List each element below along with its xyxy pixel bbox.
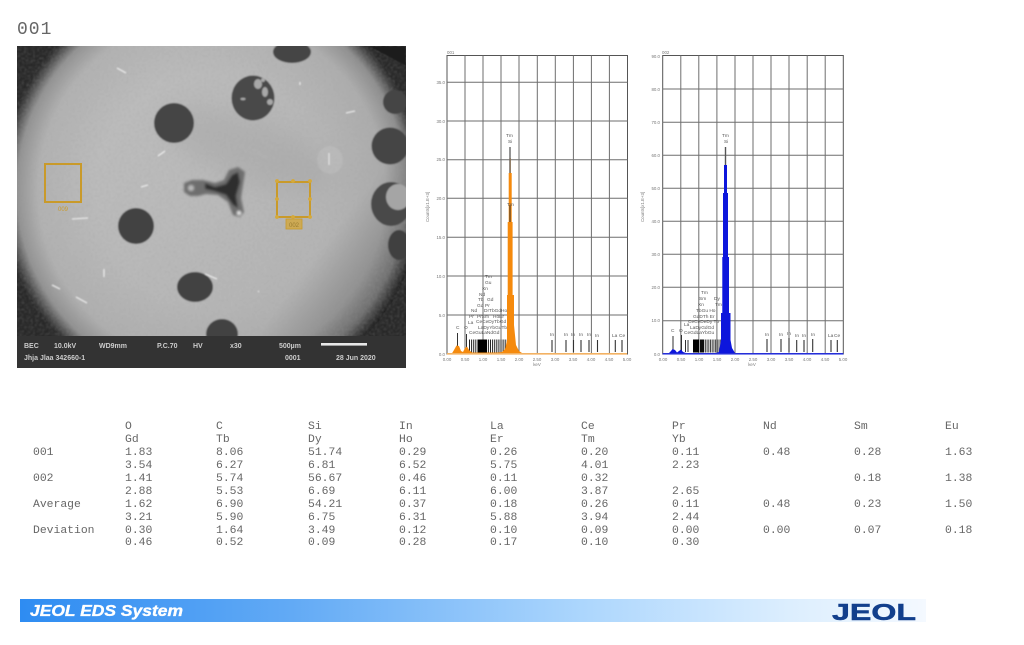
data table: 0.28 [399,537,427,549]
axis labels: 15.0 [436,235,446,240]
spectrum peak labels: In [802,333,806,339]
spectrum peak labels: In [787,331,791,337]
spectrum peak labels: CeGuLaNdGd [469,330,500,336]
data table: 1.38 [945,473,973,485]
spectrum peak labels: La [468,320,474,326]
axis labels: 4.00 [587,357,596,362]
axis labels: 001 [447,50,455,55]
data table: 0.00 [672,525,700,537]
spectrum peak labels: Tm [722,133,729,139]
data table: In [399,421,413,433]
data table: C [216,421,223,433]
data table: 5.88 [490,512,518,524]
data table: Gd [125,434,139,446]
title: 001 [17,20,52,40]
data table: 0.10 [490,525,518,537]
spectrum peak labels: Dy [714,296,720,302]
image caption: 28 Jun 2020 [336,355,376,362]
axis labels: 25.0 [436,157,446,162]
image caption: BEC [24,343,39,350]
data table: 2.44 [672,512,700,524]
spectrum peak labels: Nd [471,308,477,314]
image caption: Jhja Jlaa 342660-1 [24,355,85,362]
spectrum peak labels: O [679,328,683,334]
scale bar [321,343,367,346]
data table: 0.23 [854,499,882,511]
data table: 6.52 [399,460,427,472]
axis labels: Counts[x1.E+3] [640,192,645,222]
micrograph image area [17,46,406,336]
data table: 4.01 [581,460,609,472]
data table: Si [308,421,322,433]
axis labels: 3.00 [767,357,776,362]
peak marker lines [458,333,622,354]
data table: 2.65 [672,486,700,498]
data table: 3.49 [308,525,336,537]
spectrum peak labels: Si [724,139,728,145]
spectrum peak labels: C [671,328,675,334]
spectrum peak labels [456,133,625,339]
spectrum peak labels: Pr [485,303,490,309]
data table: Nd [763,421,777,433]
axis labels: 2.00 [731,357,740,362]
spectrum peak labels: Ce [834,333,840,339]
axis labels: 90.0 [651,54,661,59]
data table: 1.50 [945,499,973,511]
axis labels: 1.00 [479,357,488,362]
data table: 001 [33,447,54,459]
image caption: WD9mm [99,343,127,350]
spectrum peak labels: In [811,332,815,338]
axis labels: 35.0 [436,80,446,85]
data table: Pr [672,421,686,433]
axis labels: 4.50 [821,357,830,362]
data table: O [125,421,132,433]
spectrum peak labels: Tm [701,290,708,296]
axis labels: 2.50 [533,357,542,362]
axis labels: 002 [662,50,670,55]
spectrum peak labels: Tm [507,202,514,208]
data table: 2.88 [125,486,153,498]
spectrum peak labels: In [550,332,554,338]
data table: 0.07 [854,525,881,537]
image caption: HV [193,343,203,350]
spectrum peak labels: In [579,332,583,338]
dense element markers [693,340,722,352]
selection box: 009: 009 [58,207,69,213]
axis labels: 30.0 [651,252,661,257]
data table: 56.67 [308,473,342,485]
axis labels: 3.50 [569,357,578,362]
spectrum peak labels: La [828,333,834,339]
selection box: 002 [275,179,312,229]
data table: 5.90 [216,512,244,524]
data table: 0.11 [490,473,518,485]
selection box: 002: 002 [289,223,300,229]
spectrum peak labels: CeGdLaYbGu [684,330,714,336]
data table: 1.83 [125,447,153,459]
spectrum peak labels: In [779,332,783,338]
data table: 51.74 [308,447,342,459]
data table: 0.46 [399,473,427,485]
axis labels: 40.0 [651,219,661,224]
bright specks [52,68,355,303]
data table: 2.23 [672,460,700,472]
data table: Deviation [33,525,95,537]
spectrum peak labels: PrSm [477,314,489,320]
axis labels: 20.0 [436,196,446,201]
axis labels: 10.0 [651,318,661,323]
data table: 0.11 [672,447,700,459]
panel: SEM micrograph [17,46,406,368]
spectrum peak labels: TbGu Ho [696,308,716,314]
data table: 0.18 [854,473,882,485]
data table: 0.17 [490,537,517,549]
data table: 0.00 [763,525,791,537]
spectrum peak labels: Tm [485,274,492,280]
spectrum peak labels: LaDyGdGd [690,325,714,331]
data table: 0.37 [399,499,426,511]
spectrum peak labels: GdDTh Er [693,314,715,320]
data table: 6.11 [399,486,427,498]
axis labels: 1.50 [497,357,506,362]
data table: Ce [581,421,595,433]
data table [33,421,973,549]
axis labels: 0.50 [677,357,686,362]
data table: 5.75 [490,460,518,472]
spectrum peak labels [671,133,840,339]
axis labels: 0.0 [439,352,446,357]
data table: 6.90 [216,499,244,511]
dense element markers [469,340,507,352]
data table: 0.09 [308,537,336,549]
spectrum peak labels: In [795,333,799,339]
axis labels: 50.0 [651,186,661,191]
central defect [184,167,245,217]
spectrum peak labels: Xn [698,302,704,308]
data table: 0.26 [581,499,609,511]
data table: 0.11 [672,499,700,511]
data table: 3.87 [581,486,608,498]
spectrum peak labels: HoEr [493,314,504,320]
data table: La [490,421,504,433]
spectrum peak labels: CeCeDyTbGd [476,319,506,325]
footer banner [20,599,926,625]
axis labels: 1.00 [695,357,704,362]
data table: 0.46 [125,537,153,549]
spectrum peak labels: Ce [619,333,625,339]
data table: 0.10 [581,537,609,549]
footer title: JEOL EDS System [30,603,183,620]
axis labels: 10.0 [436,274,446,279]
axis labels: 3.00 [551,357,560,362]
peak marker lines [673,335,837,354]
spectrum peak labels: Sm [699,296,706,302]
data table: 54.21 [308,499,342,511]
data table: 0.28 [854,447,882,459]
data table: 3.21 [125,512,153,524]
spectrum peak labels: CeCeDeDy Tb [688,319,719,325]
axis labels: 3.50 [785,357,794,362]
image caption: x30 [230,343,242,350]
axis labels: keV [533,362,541,367]
image caption [24,343,376,362]
data table: 6.75 [308,512,336,524]
data table: 0.12 [399,525,427,537]
axis labels: 0.00 [659,357,668,362]
data table: 1.64 [216,525,244,537]
axis labels: 60.0 [651,153,661,158]
spectrum peak labels: Gu [485,280,492,286]
spectrum peak labels: In [595,333,599,339]
data table: 3.94 [581,512,609,524]
axis labels: 2.00 [515,357,524,362]
spectrum peak labels: Pr [469,314,474,320]
JEOL logo: JEOL [832,599,916,625]
data table: 0.18 [490,499,518,511]
data table: Yb [672,434,686,446]
data table: 6.27 [216,460,243,472]
data table: Sm [854,421,868,433]
data table: Tb [216,434,230,446]
axis labels: 0.0 [654,352,661,357]
axis labels [425,50,632,367]
data table: 0.29 [399,447,427,459]
data table: 1.41 [125,473,153,485]
axis labels: 80.0 [651,87,661,92]
selection box: 009 [45,164,81,213]
spectrum peak labels: In [564,332,568,338]
chart: spectrum 002 (blue) [640,50,848,367]
data table: 0.48 [763,447,791,459]
data table: 6.31 [399,512,427,524]
axis labels: 4.00 [803,357,812,362]
spectrum peak labels: La [612,333,618,339]
orange spectrum [447,158,627,354]
spectrum peak labels: In [765,332,769,338]
axis labels: 0.00 [443,357,452,362]
spectrum peak labels: O [464,325,468,331]
data table: 0.26 [490,447,518,459]
axis labels: 1.50 [713,357,722,362]
spectrum peak labels: Gd [487,297,494,303]
data table: 1.63 [945,447,973,459]
axis labels: 5.00 [839,357,848,362]
data table: 0.52 [216,537,244,549]
data table: Ho [399,434,413,446]
data table: 8.06 [216,447,244,459]
data table: 5.53 [216,486,244,498]
axis labels: Counts[x1.E+3] [425,192,430,222]
spectrum peak labels: Si [508,139,512,145]
axis labels: 70.0 [651,120,661,125]
image caption: 10.0kV [54,343,77,350]
data table: Tm [581,434,595,446]
data table: 1.62 [125,499,153,511]
axis labels [640,50,848,367]
data table: 002 [33,473,54,485]
spectrum peak labels: C [456,325,460,331]
data table: 0.18 [945,525,973,537]
spectrum peak labels: In [571,332,575,338]
axis labels: 2.50 [749,357,758,362]
data table: Average [33,499,81,511]
spectrum peak labels: Tm [715,302,722,308]
data table: 5.74 [216,473,244,485]
data table: 0.48 [763,499,791,511]
spectrum peak labels: Nd [479,292,485,298]
data table: 6.69 [308,486,336,498]
data table: 3.54 [125,460,153,472]
data table: Eu [945,421,959,433]
spectrum peak labels: Xn [482,286,488,292]
data table: 6.00 [490,486,518,498]
data table: 0.30 [672,537,700,549]
data table: 0.32 [581,473,609,485]
info bar [17,336,406,368]
spectrum peak labels: DrTbGdHo [484,308,508,314]
spectrum peak labels: Gd [477,303,484,309]
spectrum peak labels: Tm [506,133,513,139]
data table: Er [490,434,504,446]
axis labels: 30.0 [436,119,446,124]
spectrum peak labels: LaDyYbGuTb [478,325,507,331]
blue spectrum [663,165,843,354]
axis labels: 20.0 [651,285,661,290]
image caption: 500µm [279,343,301,350]
data table: 0.09 [581,525,609,537]
data table: 0.20 [581,447,609,459]
axis labels: 5.0 [439,313,446,318]
data table: 6.81 [308,460,336,472]
axis labels: 5.00 [623,357,632,362]
data table: 0.30 [125,525,153,537]
spectrum peak labels: Tb [478,297,484,303]
data table: Dy [308,434,322,446]
spectrum peak labels: In [587,332,591,338]
axis labels: 0.50 [461,357,470,362]
chart: spectrum 001 (orange) [425,50,632,367]
image caption: 0001 [285,355,301,362]
axis labels: keV [748,362,756,367]
axis labels: 4.50 [605,357,614,362]
image caption: P.C.70 [157,343,178,350]
spectrum peak labels: La [684,322,690,328]
